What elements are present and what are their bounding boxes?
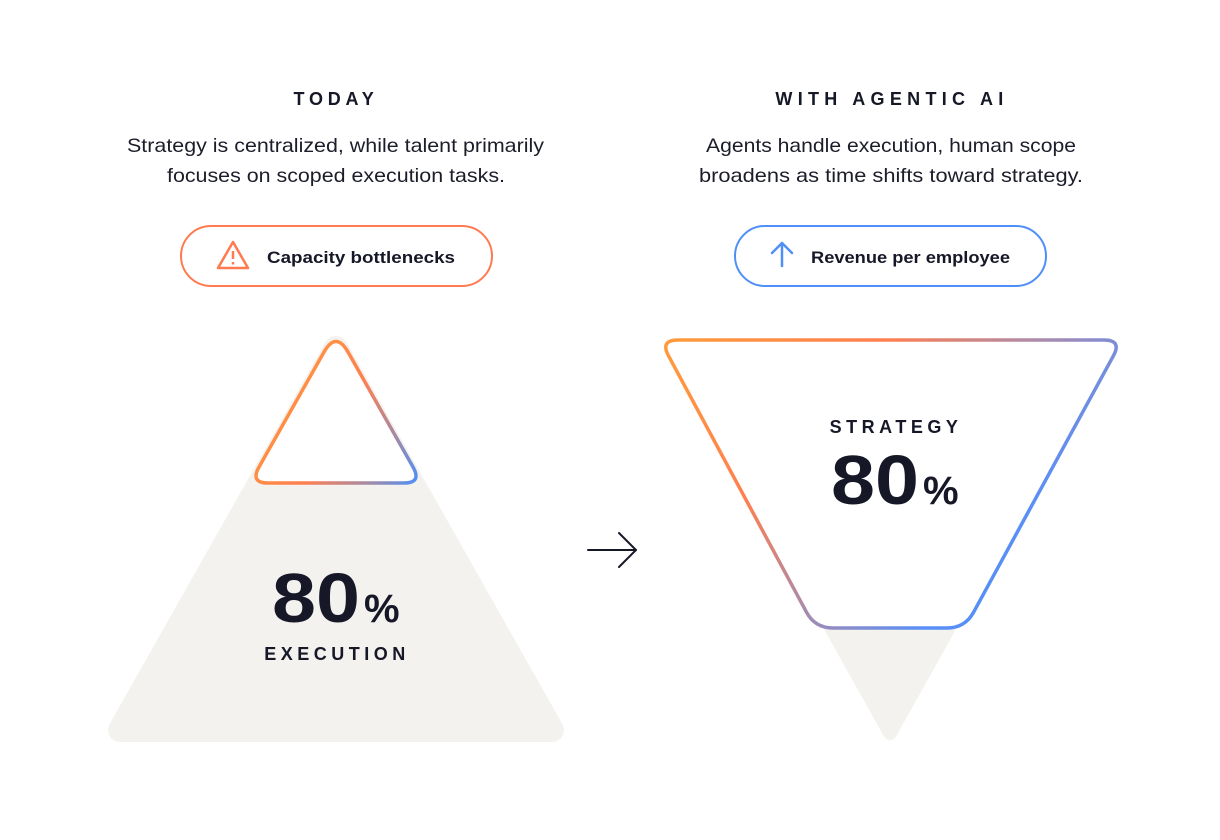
stat: 80% execution: EXECUTION bbox=[264, 644, 410, 664]
pill: capacity bottlenecks: Capacity bottlenecks bbox=[267, 248, 455, 267]
text block: agentic description: broadens as time shifts toward strategy. bbox=[699, 165, 1083, 187]
strategy area outline bbox=[666, 340, 1116, 628]
heading: with agentic ai: WITH AGENTIC AI bbox=[775, 89, 1009, 109]
stat: 80% execution bbox=[264, 559, 410, 664]
stat: strategy 80%: STRATEGY bbox=[830, 417, 962, 437]
pill: revenue per employee: Revenue per employee bbox=[811, 248, 1010, 267]
stat: strategy 80%: 80 bbox=[831, 441, 919, 519]
arrow bbox=[588, 533, 636, 567]
heading: today: TODAY bbox=[293, 89, 379, 109]
text block: agentic description bbox=[699, 135, 1083, 187]
pill: capacity bottlenecks bbox=[181, 226, 492, 286]
text block: today description bbox=[127, 135, 544, 187]
chart: agentic inverted pyramid bbox=[666, 340, 1116, 733]
text block: today description: Strategy is centralized, while talent primarily bbox=[127, 135, 544, 157]
stat: 80% execution: 80 bbox=[272, 559, 360, 637]
strategy tip outline bbox=[256, 342, 416, 483]
stat: 80% execution: % bbox=[364, 587, 400, 631]
icon: up arrow bbox=[772, 243, 792, 266]
stat: strategy 80%: % bbox=[923, 469, 959, 513]
icon: warning triangle bbox=[218, 242, 248, 268]
chart: today pyramid bbox=[120, 342, 552, 730]
text block: agentic description: Agents handle execution, human scope bbox=[706, 135, 1076, 157]
pill: revenue per employee bbox=[735, 226, 1046, 286]
stat: strategy 80% bbox=[830, 417, 962, 519]
text block: today description: focuses on scoped execution tasks. bbox=[167, 165, 505, 187]
